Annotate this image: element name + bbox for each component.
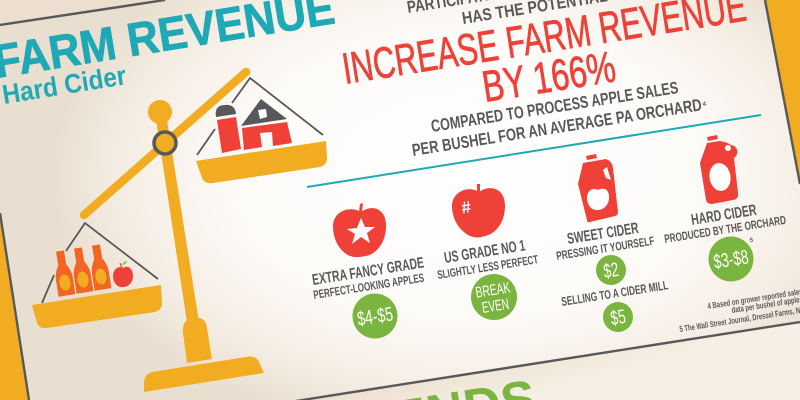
- icon: apple with hash: #: [460, 197, 473, 218]
- icon: bottle 3: [88, 244, 111, 291]
- left pan strings: [42, 223, 158, 303]
- right pan with farm: [196, 78, 327, 183]
- teal divider: [307, 115, 761, 187]
- price badge: $2: $2: [602, 259, 620, 283]
- sublabel: PERFECT-LOOKING APPLES: [312, 271, 425, 302]
- label: SWEET CIDER: [566, 220, 640, 248]
- balance scale: [32, 72, 327, 392]
- amber corner right: [766, 0, 800, 182]
- superscript 5: 5: [749, 237, 754, 244]
- scale beam: [84, 72, 246, 215]
- icon: silo: [216, 105, 241, 153]
- price badge: $5: $5: [609, 306, 627, 330]
- sublabel: SLIGHTLY LESS PERFECT: [436, 252, 540, 282]
- comparison line 2: PER BUSHEL FOR AN AVERAGE PA ORCHARD: [411, 95, 703, 160]
- sublabel: PRESSING IT YOURSELF: [555, 234, 655, 263]
- subheading: hard cider: Hard Cider: [0, 60, 129, 110]
- icon: hard cider jug: [700, 135, 738, 204]
- label: US GRADE NO 1: [443, 237, 527, 267]
- amber corner left: [0, 213, 29, 400]
- headline: by 166%: BY 166%: [479, 43, 619, 112]
- intro text: [406, 0, 705, 28]
- comparison text: [411, 78, 707, 160]
- footnotes: [679, 286, 800, 334]
- right pan: [196, 141, 327, 183]
- icon: barn: [241, 99, 292, 150]
- price badge: $3-$8: [712, 246, 750, 274]
- comparison line 1: COMPARED TO PROCESS APPLE SALES: [430, 78, 680, 136]
- label: EXTRA FANCY GRADE: [311, 254, 425, 289]
- right pan strings: [197, 78, 323, 155]
- post top ball: [148, 100, 172, 124]
- label: HARD CIDER: [690, 202, 758, 229]
- column: sweet cider: [555, 154, 669, 332]
- left pan: [32, 285, 162, 328]
- price badge: [708, 236, 754, 282]
- column: us grade no 1: [436, 184, 540, 320]
- price badge: $5: [603, 302, 633, 332]
- price badge: BREAK: [474, 279, 512, 302]
- title: [0, 0, 338, 110]
- pivot ring: [154, 132, 176, 154]
- left pan with bottles and apple: [32, 223, 162, 328]
- cider mill label: SELLING TO A CIDER MILL: [560, 278, 669, 309]
- icon: sweet cider jug: [578, 154, 618, 222]
- icon: apple with star: [333, 203, 386, 257]
- main claim: [339, 0, 750, 112]
- icon: small apple: [113, 261, 133, 287]
- price badge: $2: [596, 255, 626, 285]
- price badge: [471, 274, 517, 320]
- column: extra fancy grade: [311, 203, 425, 338]
- superscript 4: 4: [702, 101, 707, 108]
- scale post: [156, 120, 199, 322]
- price badge: $4-$5: [356, 303, 395, 331]
- post foot: [183, 318, 212, 363]
- price badge: EVEN: [481, 296, 510, 317]
- column: hard cider: [663, 135, 787, 282]
- scale base: [144, 357, 264, 392]
- icon: bottle 2: [70, 247, 93, 294]
- icon: bottle 1: [52, 250, 75, 297]
